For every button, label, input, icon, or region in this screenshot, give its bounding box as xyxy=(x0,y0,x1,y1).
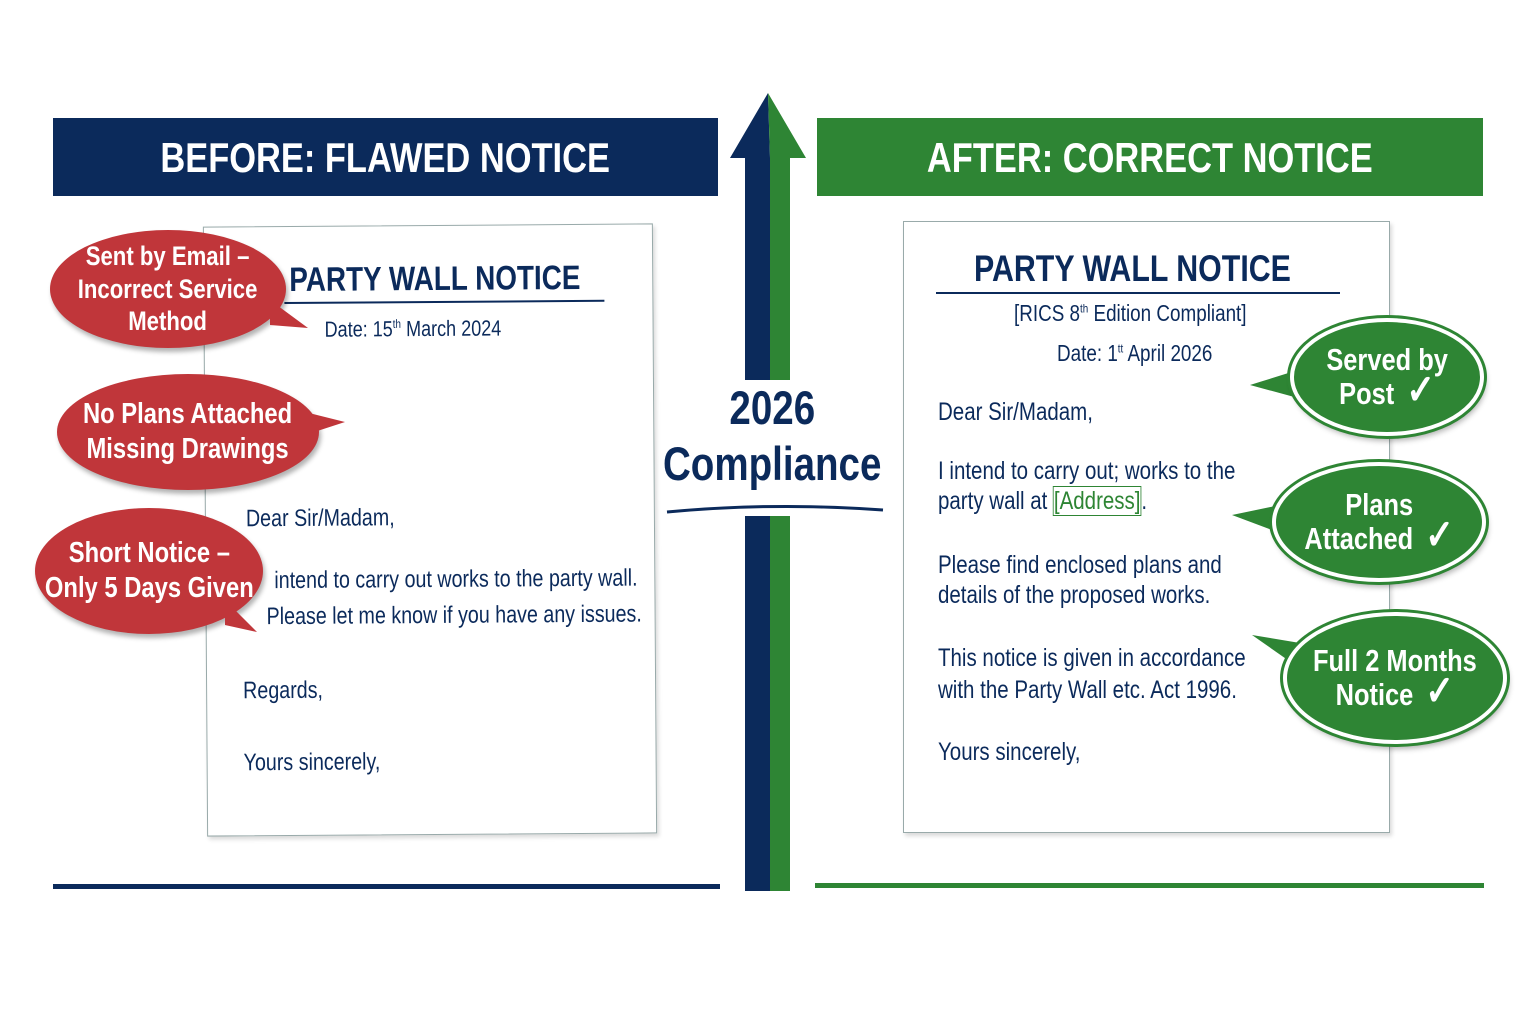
callout: full 2 months notice xyxy=(1252,635,1296,658)
callout: email: Method xyxy=(129,306,207,336)
compliance label: 2026 xyxy=(730,381,815,434)
panel: flawed notice document: Dear Sir/Madam, xyxy=(246,504,395,532)
compliance label xyxy=(655,380,890,516)
callout: plans: No Plans Attached xyxy=(83,398,293,430)
bottom lines xyxy=(53,884,720,889)
callout: plans xyxy=(57,374,319,490)
panel: flawed notice document: Yours sincerely, xyxy=(244,748,380,776)
text: Served by xyxy=(1326,342,1448,377)
panel: flawed notice document: Please let me know if you have any issues. xyxy=(267,601,642,630)
text: Attached ✓ xyxy=(1304,511,1454,558)
text: Full 2 Months xyxy=(1313,643,1477,678)
panel: correct notice document: Please find enclosed plans and xyxy=(938,551,1222,579)
callout: plans attached xyxy=(1232,506,1272,530)
panel: correct notice document: [RICS 8th Edition Compliant] xyxy=(1014,300,1247,326)
panel: correct notice document xyxy=(903,221,1390,833)
panel: correct notice document: Dear Sir/Madam, xyxy=(938,398,1093,426)
panel: correct notice document: Date: 1tt April 2026 xyxy=(1057,340,1212,366)
callout: plans: Missing Drawings xyxy=(87,433,289,465)
header: after xyxy=(817,118,1483,196)
panel: flawed notice document xyxy=(203,223,657,837)
text: Post ✓ xyxy=(1339,366,1435,413)
callout: short notice: Only 5 Days Given xyxy=(45,572,253,604)
callout: email: Incorrect Service xyxy=(78,274,258,304)
panel: correct notice document: details of the proposed works. xyxy=(938,581,1210,609)
callout: short notice: Short Notice – xyxy=(68,537,230,569)
compliance label: Compliance xyxy=(663,437,882,490)
panel: correct notice document: party wall at [Address]. xyxy=(938,487,1147,515)
text: Notice ✓ xyxy=(1336,667,1454,714)
panel: flawed notice document: intend to carry out works to the party wall. xyxy=(274,565,638,594)
header: before xyxy=(53,118,718,196)
header: after: AFTER: CORRECT NOTICE xyxy=(927,134,1373,181)
panel: correct notice document: Yours sincerely, xyxy=(938,738,1080,766)
callout: served by post xyxy=(1250,373,1292,396)
panel: flawed notice document: Regards, xyxy=(243,677,323,704)
callout: short notice xyxy=(35,508,263,634)
central arrow xyxy=(730,93,806,891)
panel: flawed notice document: Date: 15th March 2024 xyxy=(325,315,501,342)
callout: email xyxy=(50,230,286,348)
text: Plans xyxy=(1345,487,1413,522)
doc title: PARTY WALL NOTICE xyxy=(974,248,1291,289)
callout: email: Sent by Email – xyxy=(86,241,250,271)
doc title: PARTY WALL NOTICE xyxy=(289,259,581,299)
panel: correct notice document: I intend to carry out; works to the xyxy=(938,457,1235,485)
header: before: BEFORE: FLAWED NOTICE xyxy=(161,134,610,181)
panel: correct notice document: with the Party Wall etc. Act 1996. xyxy=(938,676,1237,704)
panel: correct notice document: This notice is given in accordance xyxy=(938,644,1246,672)
